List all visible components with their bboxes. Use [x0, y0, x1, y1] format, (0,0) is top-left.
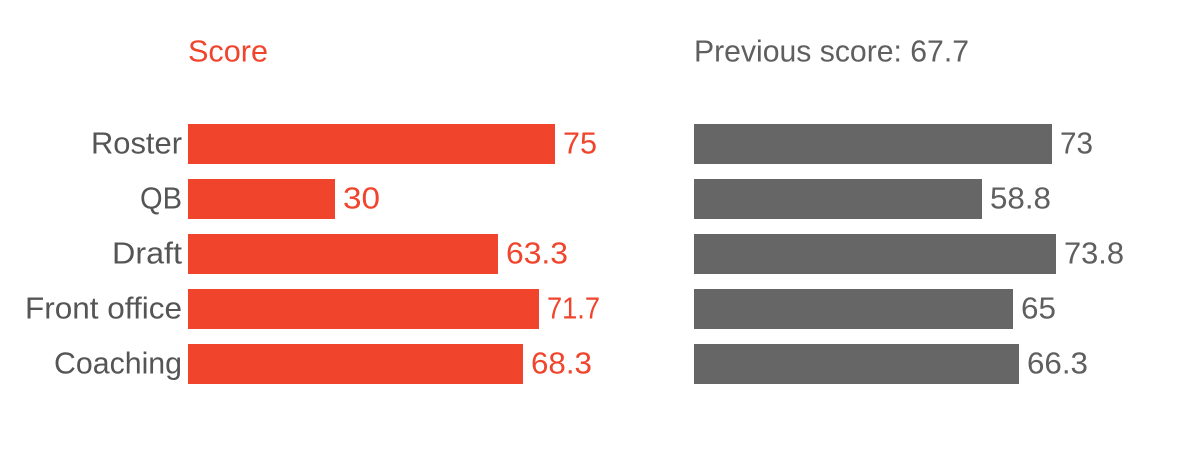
- bar chart: previous score: 73: [1060, 126, 1093, 160]
- heading: previous score: Previous score: 67.7: [694, 34, 969, 68]
- bar chart: score: 71.7: [547, 292, 600, 326]
- bar chart: score: 30: [343, 182, 380, 216]
- category labels: Roster: [91, 126, 182, 160]
- bar chart: previous score: 73.8: [1064, 236, 1124, 270]
- category labels: Coaching: [54, 346, 182, 380]
- bar chart: previous score: [694, 124, 1124, 384]
- bar chart: previous score: 65: [1021, 292, 1056, 326]
- category labels: Front office: [25, 292, 182, 326]
- heading: score: Score: [188, 34, 268, 68]
- category labels: [25, 126, 183, 380]
- category labels: Draft: [112, 236, 183, 270]
- bar chart: score: 68.3: [531, 346, 592, 380]
- bar chart: score: 63.3: [506, 236, 568, 270]
- bar chart: score: 75: [563, 126, 597, 160]
- bar chart: previous score: 66.3: [1027, 346, 1088, 380]
- category labels: QB: [140, 182, 182, 216]
- bar chart: previous score: 58.8: [990, 182, 1051, 216]
- bar chart: score: [188, 124, 600, 384]
